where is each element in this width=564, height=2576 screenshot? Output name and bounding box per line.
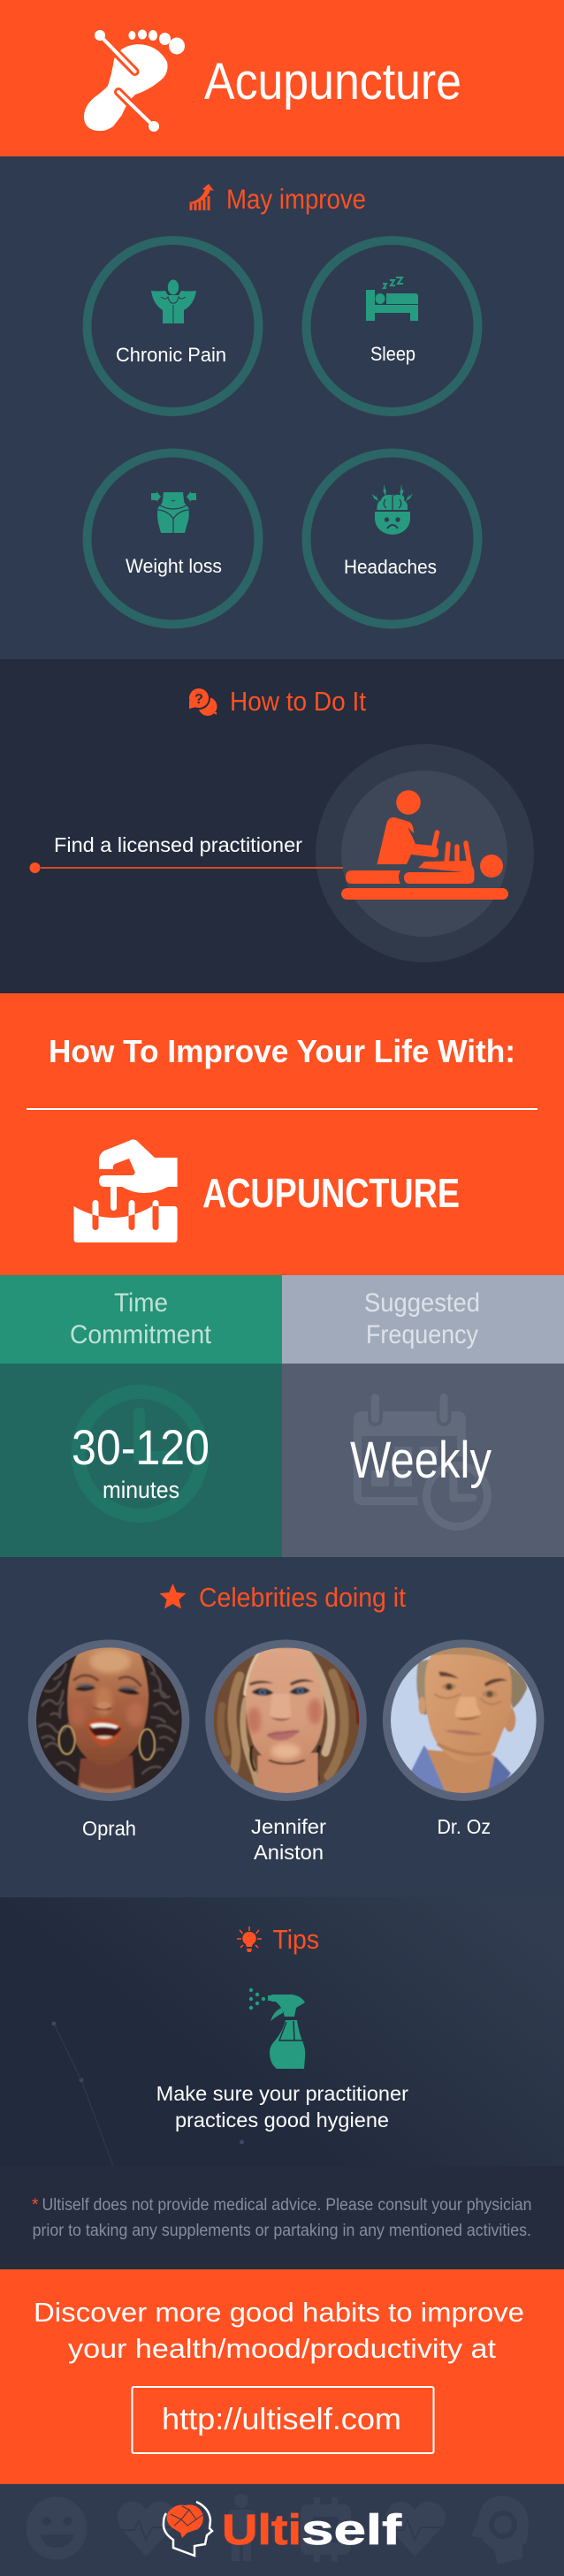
- logo wordmark: Ulti: [222, 2507, 301, 2554]
- panel: footer: [0, 2484, 564, 2576]
- benefit: sleep: [306, 240, 477, 412]
- label: Frequency: [366, 1320, 478, 1349]
- label: Headaches: [344, 556, 437, 578]
- benefit: weight loss: [87, 452, 258, 624]
- header panel: [0, 0, 564, 156]
- call to action text: [34, 2297, 524, 2364]
- name: Jennifer Aniston: [251, 1815, 326, 1864]
- icon: back pain: [151, 279, 196, 323]
- step text: Find a licensed practitioner: [54, 833, 302, 856]
- name: Dr. Oz: Dr. Oz: [437, 1815, 491, 1838]
- heading: tips: [237, 1924, 319, 1955]
- tip text: Make sure your practitioner: [156, 2082, 408, 2105]
- label: Commitment: [70, 1320, 212, 1349]
- panel: how to do it: [0, 659, 564, 993]
- heading: How To Improve Your Life With:: [49, 1033, 515, 1069]
- logo mark: [164, 2502, 212, 2556]
- link button: http://ultiself.com: [162, 2403, 401, 2436]
- call to action text: your health/mood/productivity at: [68, 2333, 496, 2364]
- disclaimer: *: [32, 2196, 39, 2215]
- icon: waist: [151, 491, 196, 533]
- icon: hand placing needles: [74, 1139, 178, 1242]
- panel: how to improve your life: [0, 993, 564, 1275]
- label: Sleep: [370, 343, 415, 365]
- label: Suggested: [364, 1288, 480, 1318]
- background icons: [27, 2494, 529, 2565]
- step connector: [30, 862, 343, 873]
- logo: [164, 2502, 402, 2556]
- benefit: chronic pain: [87, 240, 258, 412]
- label: Time: [114, 1288, 168, 1318]
- panel: suggested frequency: [282, 1275, 564, 1557]
- tip text: [156, 2082, 408, 2131]
- benefit: headaches: [306, 452, 477, 624]
- panel: tips: [0, 1897, 564, 2269]
- portrait: Oprah: [28, 1639, 189, 1801]
- icon: bed: [366, 277, 418, 321]
- call to action text: Discover more good habits to improve: [34, 2297, 524, 2328]
- heading: how to do it: ?: [194, 692, 203, 707]
- illustration: practitioner and patient: [316, 744, 534, 962]
- icon: clock watermark: [78, 1392, 202, 1516]
- disclaimer: prior to taking any supplements or partaking in any mentioned activities.: [33, 2222, 531, 2240]
- panel: may improve: [0, 156, 564, 659]
- name: Oprah: Oprah: [82, 1817, 136, 1840]
- icon: calendar watermark: [354, 1390, 497, 1536]
- value: 30-120: [72, 1419, 210, 1475]
- heading: celebrities doing it: Celebrities doing it: [199, 1582, 406, 1613]
- title: Acupuncture: [204, 53, 461, 110]
- heading: tips: Tips: [272, 1924, 319, 1955]
- unit: minutes: [103, 1477, 179, 1503]
- label: Weight loss: [126, 555, 222, 577]
- portrait: Dr. Oz: [383, 1639, 544, 1801]
- panel: time commitment: [0, 1275, 282, 1557]
- label: Chronic Pain: [116, 344, 226, 366]
- name: Jennifer Aniston: Aniston: [254, 1841, 324, 1864]
- value: Weekly: [350, 1432, 492, 1489]
- logo wordmark: [222, 2507, 402, 2554]
- tip text: practices good hygiene: [175, 2109, 389, 2131]
- portrait: Jennifer Aniston: [205, 1639, 367, 1801]
- link button: [133, 2387, 433, 2453]
- panel: celebrities: [28, 1584, 545, 1859]
- disclaimer: [32, 2196, 532, 2240]
- panel: call to action: [0, 2269, 564, 2484]
- subject title: ACUPUNCTURE: [202, 1170, 460, 1216]
- logo wordmark: self: [301, 2507, 402, 2554]
- icon: headache brain: [372, 484, 413, 535]
- disclaimer: Ultiself does not provide medical advice. Please consult your physician: [42, 2196, 532, 2215]
- icon: spray bottle: [249, 1988, 305, 2069]
- heading: may improve: May improve: [226, 183, 366, 215]
- name: Jennifer Aniston: Jennifer: [251, 1815, 326, 1838]
- label: [70, 1288, 212, 1349]
- label: [364, 1288, 480, 1349]
- icon: foot with needles: [84, 30, 185, 132]
- heading: how to do it: How to Do It: [230, 686, 366, 717]
